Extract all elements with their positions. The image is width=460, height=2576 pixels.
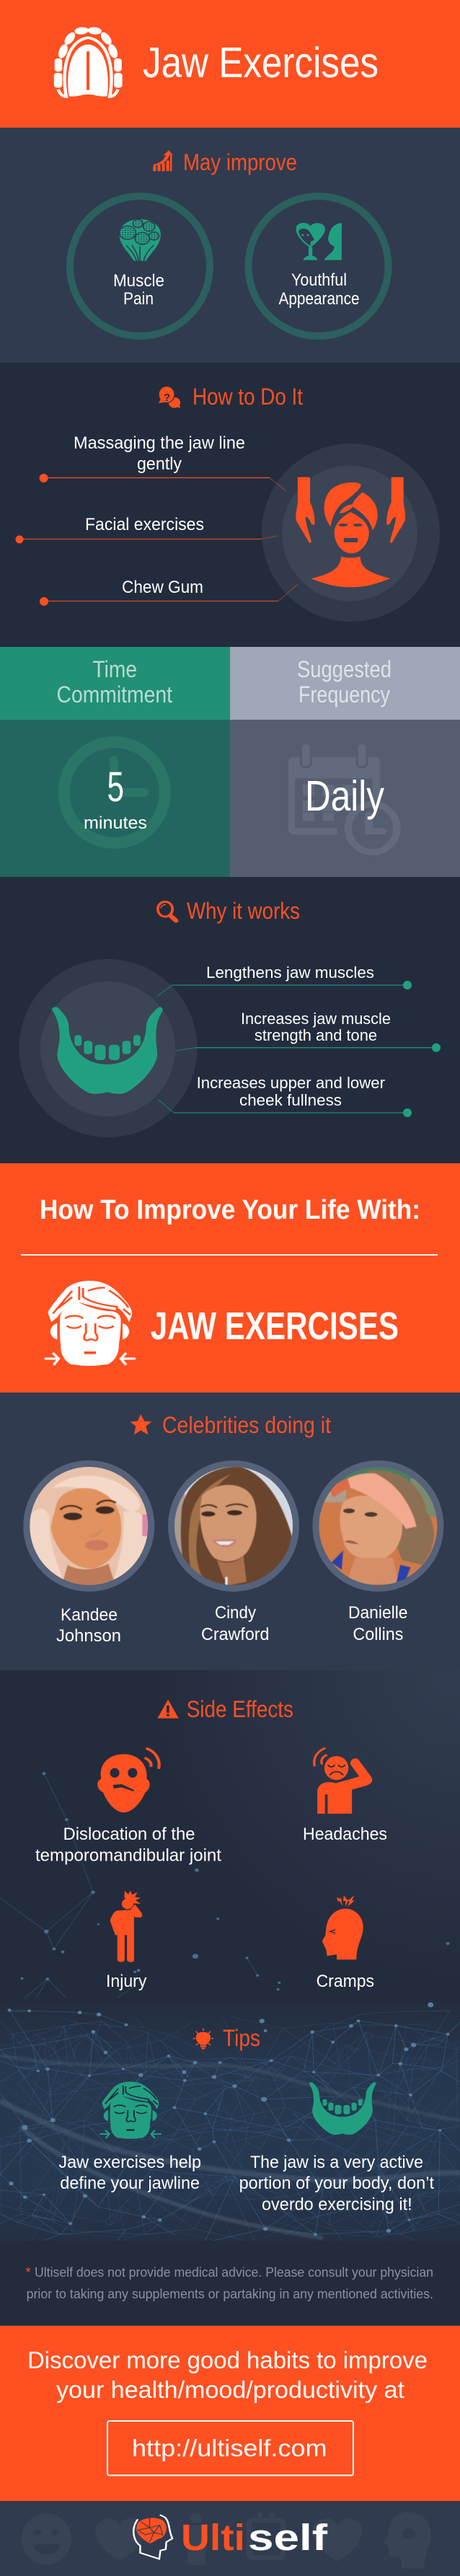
side effect: dislocation: Dislocation of the bbox=[63, 1825, 195, 1844]
habit name: JAW EXERCISES bbox=[151, 1305, 399, 1348]
heading: may improve: May improve bbox=[183, 149, 297, 175]
call to action text: Discover more good habits to improve bbox=[27, 2347, 428, 2373]
icon: face with jaw arrows bbox=[45, 1281, 136, 1366]
panel: time commitment bbox=[0, 647, 230, 877]
icon: mirror and face bbox=[296, 223, 342, 260]
icon: lower jaw bbox=[19, 959, 198, 1137]
heading: how to improve your life with: How To Improve Your Life With: bbox=[40, 1195, 420, 1225]
icon: clock bbox=[64, 742, 165, 843]
side effect: injury bbox=[106, 1891, 146, 1991]
panel: how to improve your life bbox=[0, 1163, 460, 1393]
heading: how to do it bbox=[159, 384, 303, 410]
reason: lengthens jaw muscles bbox=[157, 963, 412, 997]
panel: why it works bbox=[0, 877, 460, 1163]
heading: why it works: Why it works bbox=[187, 898, 300, 924]
reason: increases jaw muscle strength and tone: Increases jaw muscle bbox=[241, 1010, 391, 1028]
logo: Ultiself: self bbox=[248, 2517, 328, 2558]
celebrity: Kandee Johnson bbox=[25, 1464, 155, 1646]
celebrity: Cindy Crawford: Cindy bbox=[215, 1603, 256, 1623]
disclaimer: * bbox=[26, 2265, 31, 2280]
benefit: muscle pain bbox=[70, 196, 210, 336]
side effect: headaches bbox=[303, 1748, 387, 1844]
benefit: youthful appearance: Appearance bbox=[278, 289, 359, 309]
icon: muscle bbox=[120, 219, 161, 261]
icon: calendar and clock bbox=[288, 744, 397, 852]
panel: may improve bbox=[0, 128, 460, 363]
celebrity: Danielle Collins: Danielle bbox=[348, 1603, 408, 1623]
step: chew gum bbox=[40, 578, 298, 606]
tip: don't overdo it bbox=[239, 2082, 434, 2215]
reason: increases jaw muscle strength and tone bbox=[175, 1010, 441, 1052]
value: daily: Daily bbox=[305, 772, 384, 820]
heading: how to do it: ? bbox=[164, 392, 170, 404]
panel: suggested frequency bbox=[230, 647, 460, 877]
step: massaging the jaw line: gently bbox=[137, 454, 182, 474]
celebrity: Kandee Johnson: Johnson bbox=[56, 1626, 121, 1646]
benefit: youthful appearance bbox=[248, 196, 388, 336]
celebrity: Kandee Johnson: Kandee bbox=[61, 1605, 118, 1625]
heading: suggested frequency: Frequency bbox=[298, 682, 390, 707]
tip: define your jawline bbox=[58, 2082, 201, 2193]
value: 5 minutes: minutes bbox=[84, 813, 147, 833]
call to action text bbox=[27, 2347, 428, 2403]
panel: celebrities bbox=[0, 1393, 460, 1670]
value: 5 minutes bbox=[84, 764, 147, 833]
benefit: muscle pain: Muscle bbox=[113, 271, 164, 291]
reason: increases cheek fullness: Increases upper and lower bbox=[197, 1074, 385, 1092]
step: facial exercises: Facial exercises bbox=[85, 515, 204, 534]
disclaimer: prior to taking any supplements or partaking in any mentioned activities. bbox=[27, 2287, 433, 2301]
celebrity: Danielle Collins: Collins bbox=[353, 1625, 403, 1644]
disclaimer: Ultiself does not provide medical advice. Please consult your physician bbox=[35, 2265, 433, 2280]
heading: how to do it: How to Do It bbox=[193, 384, 303, 410]
heading: suggested frequency: Suggested bbox=[297, 656, 392, 682]
heading: tips bbox=[193, 2025, 260, 2051]
panel: side effects and tips background bbox=[0, 1670, 460, 2241]
heading: side effects: Side Effects bbox=[187, 1696, 293, 1722]
celebrity: Danielle Collins bbox=[314, 1464, 443, 1644]
disclaimer bbox=[26, 2265, 433, 2301]
panel: side effects bbox=[35, 1696, 387, 1991]
side effect: cramps bbox=[317, 1895, 374, 1991]
side effect: headaches: Headaches bbox=[303, 1825, 387, 1844]
tip: don't overdo it: portion of your body, don’t bbox=[239, 2174, 434, 2193]
side effect: cramps: Cramps bbox=[317, 1972, 374, 1991]
reason: increases cheek fullness: cheek fullness bbox=[239, 1091, 342, 1109]
step: facial exercises bbox=[16, 515, 278, 544]
link button bbox=[107, 2421, 353, 2475]
tip: don't overdo it: The jaw is a very active bbox=[250, 2153, 423, 2172]
step: massaging the jaw line bbox=[40, 433, 286, 491]
link button: http://ultiself.com bbox=[132, 2435, 327, 2461]
step: massaging the jaw line: Massaging the jaw line bbox=[74, 433, 245, 453]
benefit: youthful appearance: Youthful bbox=[291, 270, 347, 290]
icon: upper jaw bbox=[54, 27, 123, 97]
heading: time commitment: Time bbox=[92, 656, 137, 682]
logo: Ultiself bbox=[133, 2515, 328, 2559]
heading: time commitment: Commitment bbox=[56, 682, 172, 707]
celebrity: Cindy Crawford: Crawford bbox=[201, 1625, 270, 1644]
tip: define your jawline: define your jawline bbox=[60, 2174, 200, 2193]
panel: footer bbox=[0, 2501, 460, 2576]
panel: header bbox=[0, 0, 460, 128]
faint habit icons bbox=[22, 2512, 431, 2569]
celebrity: Cindy Crawford bbox=[170, 1464, 297, 1644]
panel: call to action bbox=[0, 2326, 460, 2501]
benefit: muscle pain: Pain bbox=[123, 289, 154, 309]
side effect: dislocation: temporomandibular joint bbox=[35, 1846, 221, 1866]
tip: don't overdo it: overdo exercising it! bbox=[262, 2195, 412, 2215]
panel: tips bbox=[58, 2025, 434, 2215]
step: chew gum: Chew Gum bbox=[122, 578, 203, 597]
panel: how to do it bbox=[0, 363, 460, 647]
logo: Ultiself: Ulti bbox=[181, 2517, 245, 2558]
heading: time commitment bbox=[56, 656, 172, 707]
reason: increases cheek fullness bbox=[159, 1074, 412, 1117]
call to action text: your health/mood/productivity at bbox=[56, 2376, 404, 2403]
icon: face massage bbox=[262, 444, 440, 622]
side effect: injury: Injury bbox=[106, 1972, 146, 1991]
heading: suggested frequency bbox=[297, 656, 392, 707]
heading: tips: Tips bbox=[223, 2025, 260, 2051]
value: 5 minutes: 5 bbox=[107, 764, 124, 811]
title: Jaw Exercises bbox=[143, 39, 379, 87]
reason: increases jaw muscle strength and tone: strength and tone bbox=[255, 1026, 377, 1044]
heading: celebrities doing it: Celebrities doing it bbox=[162, 1412, 331, 1438]
reason: lengthens jaw muscles: Lengthens jaw muscles bbox=[206, 963, 374, 982]
side effect: dislocation bbox=[35, 1748, 221, 1866]
tip: define your jawline: Jaw exercises help bbox=[58, 2153, 201, 2172]
